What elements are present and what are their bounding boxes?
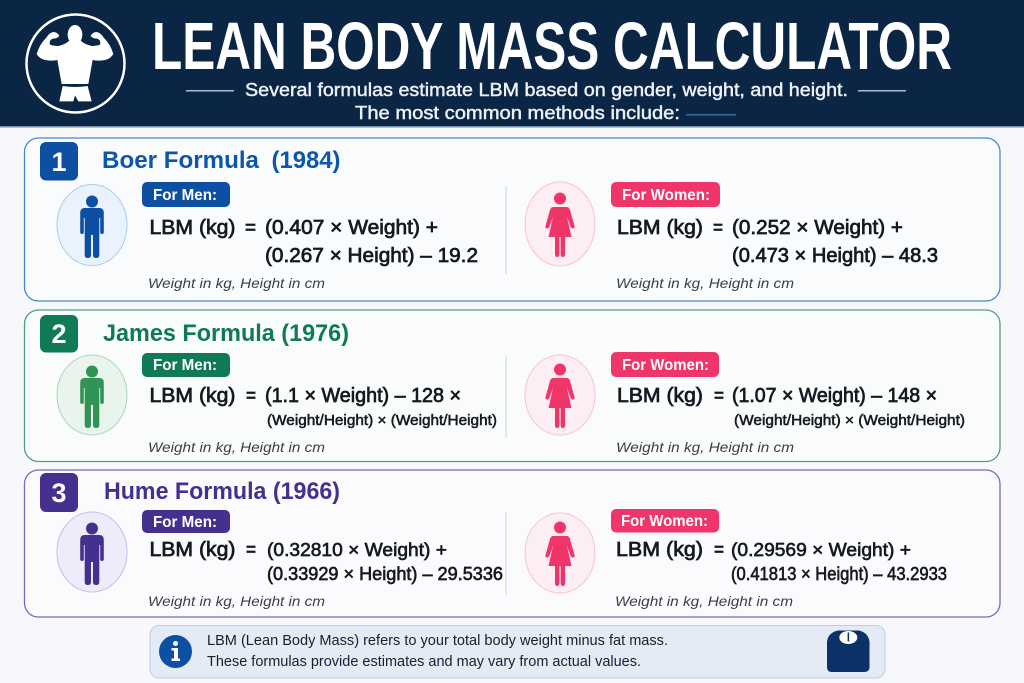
men pill bbox=[142, 510, 230, 533]
icon: weighing scale bbox=[827, 630, 870, 672]
women formula: = bbox=[714, 384, 724, 407]
heading: Hume: Hume Formula (1966) bbox=[104, 478, 340, 505]
women formula: (0.473 × Height) – 48.3 bbox=[732, 244, 938, 267]
women pill bbox=[611, 352, 719, 377]
women formula bbox=[616, 538, 947, 584]
heading: Boer bbox=[102, 147, 340, 174]
callout text bbox=[207, 632, 668, 670]
heading: Boer: Boer Formula bbox=[102, 147, 260, 174]
callout: definition note bbox=[150, 626, 885, 678]
callout text: These formulas provide estimates and may vary from actual values. bbox=[207, 653, 641, 670]
icon: info bbox=[159, 635, 192, 668]
number badge 2 bbox=[40, 315, 78, 352]
women pill: For Women: bbox=[622, 187, 710, 204]
number badge 3 bbox=[40, 473, 78, 512]
number badge 2: 2 bbox=[51, 319, 67, 349]
subtitle: The most common methods include: bbox=[355, 103, 680, 123]
men pill: For Men: bbox=[153, 357, 217, 374]
icon: woman bbox=[525, 355, 595, 435]
women formula: (0.252 × Weight) + bbox=[732, 216, 903, 239]
women pill: For Women: bbox=[621, 513, 708, 530]
number badge 3: 3 bbox=[51, 478, 67, 508]
icon: woman bbox=[525, 513, 595, 593]
number badge 1 bbox=[40, 142, 78, 180]
men formula: = bbox=[245, 216, 256, 239]
icon: bodybuilder logo bbox=[26, 14, 124, 112]
panel: James formula bbox=[24, 310, 1000, 462]
number badge 1: 1 bbox=[51, 147, 67, 177]
note: Weight in kg, Height in cm bbox=[616, 275, 794, 291]
men pill bbox=[142, 353, 230, 377]
women formula: LBM (kg) bbox=[616, 538, 703, 561]
note: Weight in kg, Height in cm bbox=[615, 593, 793, 609]
heading: Boer: (1984) bbox=[272, 147, 340, 174]
women formula bbox=[617, 216, 938, 267]
note: Weight in kg, Height in cm bbox=[148, 593, 325, 609]
women formula: (1.07 × Weight) – 148 × bbox=[732, 384, 937, 407]
men formula: LBM (kg) bbox=[150, 216, 236, 239]
women pill bbox=[611, 182, 720, 207]
subtitle: Several formulas estimate LBM based on gender, weight, and height. bbox=[245, 80, 848, 100]
men formula: (0.267 × Height) – 19.2 bbox=[265, 244, 478, 267]
men formula: LBM (kg) bbox=[150, 384, 236, 407]
men formula: (1.1 × Weight) – 128 × bbox=[265, 384, 461, 407]
women formula: = bbox=[714, 538, 724, 561]
icon: man bbox=[57, 355, 127, 435]
men formula bbox=[150, 538, 503, 584]
men pill: For Men: bbox=[153, 514, 217, 531]
heading: James: James Formula (1976) bbox=[103, 320, 349, 347]
women formula: (Weight/Height) × (Weight/Height) bbox=[734, 412, 965, 429]
note: Weight in kg, Height in cm bbox=[616, 439, 794, 455]
women pill bbox=[611, 509, 719, 532]
panel: Hume formula bbox=[24, 470, 1000, 617]
men formula: (0.407 × Weight) + bbox=[265, 216, 438, 239]
men formula: (0.32810 × Weight) + bbox=[267, 539, 447, 560]
subtitle bbox=[186, 80, 906, 123]
women formula: LBM (kg) bbox=[617, 216, 703, 239]
women pill: For Women: bbox=[622, 357, 709, 374]
men formula bbox=[150, 216, 478, 267]
note: Weight in kg, Height in cm bbox=[148, 275, 325, 291]
men formula: LBM (kg) bbox=[150, 538, 236, 561]
men formula: = bbox=[246, 384, 256, 407]
men formula: (0.33929 × Height) – 29.5336 bbox=[267, 563, 503, 584]
icon: man bbox=[57, 184, 127, 266]
icon: woman bbox=[525, 182, 595, 266]
men formula: = bbox=[246, 538, 256, 561]
header banner bbox=[0, 0, 1024, 128]
men formula: (Weight/Height) × (Weight/Height) bbox=[267, 412, 497, 429]
note: Weight in kg, Height in cm bbox=[148, 439, 325, 455]
women formula: LBM (kg) bbox=[617, 384, 703, 407]
women formula: = bbox=[713, 216, 723, 239]
women formula: (0.29569 × Weight) + bbox=[731, 539, 911, 560]
women formula bbox=[617, 384, 965, 429]
panel: Boer formula bbox=[24, 138, 1000, 301]
men pill: For Men: bbox=[153, 187, 217, 204]
callout text: LBM (Lean Body Mass) refers to your total body weight minus fat mass. bbox=[207, 632, 668, 649]
icon: man bbox=[57, 512, 127, 592]
men pill bbox=[142, 182, 230, 207]
men formula bbox=[150, 384, 497, 429]
women formula: (0.41813 × Height) – 43.2933 bbox=[731, 563, 947, 584]
